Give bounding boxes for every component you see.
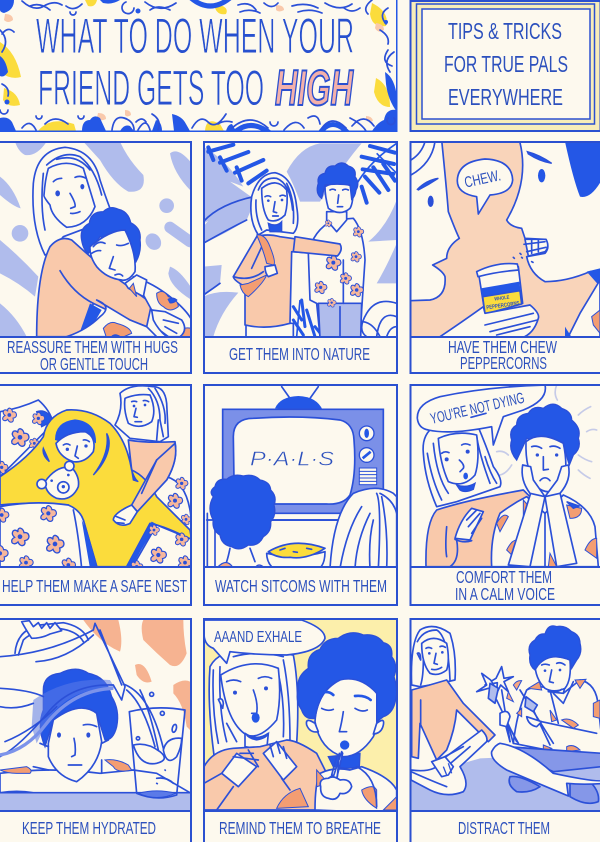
woman watching xyxy=(330,488,397,568)
caption: REMIND THEM TO BREATHE xyxy=(219,818,381,838)
bowl of snacks xyxy=(267,543,325,570)
speech bubble xyxy=(417,385,545,445)
caption: KEEP THEM HYDRATED xyxy=(22,818,156,838)
peppercorn jar xyxy=(477,264,523,314)
man xyxy=(308,218,365,337)
television: P·A·L·S xyxy=(250,447,334,470)
header panel: title with doodle border: FRIEND GETS TOO xyxy=(38,60,264,116)
speech bubble: CHEW. xyxy=(463,167,502,192)
speech bubble: YOU'RE NOT DYING xyxy=(429,390,526,428)
panel: distract them xyxy=(410,619,600,842)
caption: DISTRACT THEM xyxy=(458,818,550,838)
floor xyxy=(411,753,600,813)
panel: keep hydrated xyxy=(0,619,192,842)
panel: comfort in a calm voice xyxy=(410,385,600,605)
hands on face xyxy=(522,465,545,497)
forearms xyxy=(508,490,545,567)
woman xyxy=(251,173,298,235)
caption xyxy=(7,337,178,374)
caption: COMFORT THEM xyxy=(456,567,552,587)
woman xyxy=(423,423,501,507)
hand holding jar xyxy=(440,305,539,338)
caption: HELP THEM MAKE A SAFE NEST xyxy=(2,576,187,596)
caption: REASSURE THEM WITH HUGS xyxy=(7,337,178,357)
peppercorn jar: WHOLE xyxy=(494,295,510,303)
jug handle and hand xyxy=(15,623,88,655)
boy in hood xyxy=(55,419,96,443)
man xyxy=(513,680,600,753)
television xyxy=(213,387,397,520)
caption: GET THEM INTO NATURE xyxy=(229,344,370,364)
panel: tips and tricks box xyxy=(410,1,600,131)
panel frame xyxy=(410,619,600,842)
bouquet of flowers xyxy=(477,667,553,745)
panel: reassure with hugs xyxy=(0,142,192,374)
panel frame xyxy=(204,142,397,373)
woman xyxy=(411,627,455,687)
glass xyxy=(129,692,185,798)
header panel: title with doodle border xyxy=(0,0,398,133)
table xyxy=(0,794,190,810)
man head xyxy=(511,404,579,465)
caption: IN A CALM VOICE xyxy=(455,584,555,604)
pitcher with water xyxy=(32,680,115,743)
speech bubble xyxy=(457,159,513,214)
bed cover xyxy=(0,503,97,568)
woman xyxy=(115,386,168,442)
panel: remind to breathe xyxy=(203,619,397,842)
title word: HIGH: HIGH xyxy=(275,60,354,116)
speech bubble: AAAND EXHALE xyxy=(214,629,302,646)
breath and joint xyxy=(320,752,352,799)
pillow and body xyxy=(0,770,190,793)
caption xyxy=(448,337,557,373)
panel: get them into nature xyxy=(203,142,397,373)
tips text xyxy=(444,18,568,110)
man shirt xyxy=(491,495,598,567)
crossed legs xyxy=(507,747,600,772)
caption xyxy=(455,567,555,604)
panel frame xyxy=(204,619,397,842)
panel frame xyxy=(0,619,191,842)
woman xyxy=(209,650,298,773)
blanket xyxy=(0,410,192,567)
peppercorn jar: PEPPERCORNS xyxy=(486,301,520,311)
boy watching xyxy=(210,475,275,568)
panel frame xyxy=(0,142,191,373)
panel frame xyxy=(204,385,397,605)
woman's arm over the blanket xyxy=(132,443,176,512)
caption: PEPPERCORNS xyxy=(460,353,547,373)
speech bubble xyxy=(204,620,325,663)
panel: have them chew peppercorns xyxy=(410,140,600,373)
woman's hand xyxy=(113,505,137,525)
panel frame xyxy=(410,385,600,605)
panel: watch sitcoms xyxy=(204,385,397,605)
panel: make a safe nest xyxy=(0,385,193,605)
panel frame xyxy=(410,142,600,373)
head xyxy=(40,669,118,747)
caption: OR GENTLE TOUCH xyxy=(40,354,148,374)
panel frame xyxy=(0,385,191,605)
man xyxy=(315,767,397,813)
teddy bear xyxy=(45,467,79,499)
caption: WATCH SITCOMS WITH THEM xyxy=(215,576,387,596)
